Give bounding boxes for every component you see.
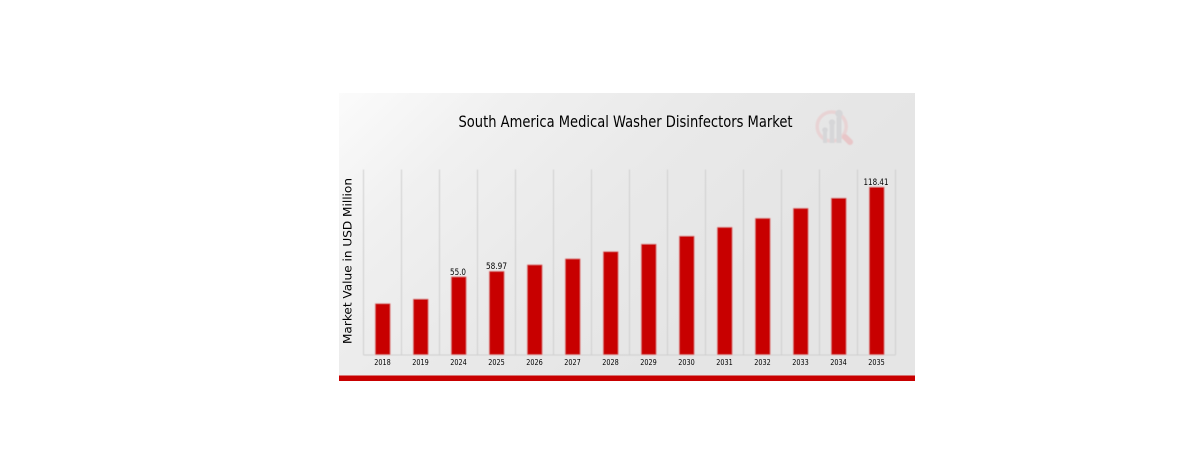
- bars: [375, 187, 884, 355]
- title: South America Medical Washer Disinfectors Market: [458, 112, 792, 131]
- x-axis labels: 2018: [374, 358, 391, 367]
- x-axis labels: 2030: [678, 358, 695, 367]
- x-axis labels: 2025: [488, 358, 505, 367]
- x-axis labels: 2032: [754, 358, 771, 367]
- value labels: 58.97: [486, 262, 507, 272]
- x-axis labels: 2031: [716, 358, 733, 367]
- value labels: 55.0: [450, 268, 466, 278]
- x-axis labels: 2035: [868, 358, 885, 367]
- footer band: [339, 376, 915, 381]
- x-axis labels: 2026: [526, 358, 543, 367]
- panel: chart background: [339, 93, 915, 376]
- x-axis labels: 2019: [412, 358, 429, 367]
- x-axis labels: 2033: [792, 358, 809, 367]
- x-axis labels: 2034: [830, 358, 847, 367]
- x-axis labels: 2024: [450, 358, 467, 367]
- value labels: 118.41: [864, 178, 888, 188]
- x-axis labels: [374, 358, 885, 367]
- x-axis labels: 2029: [640, 358, 657, 367]
- icon: magnifier logo: [817, 110, 850, 143]
- y-axis label: Market Value in USD Million: [340, 178, 354, 344]
- x-axis labels: 2028: [602, 358, 619, 367]
- value labels: [450, 178, 888, 278]
- x-axis labels: 2027: [564, 358, 581, 367]
